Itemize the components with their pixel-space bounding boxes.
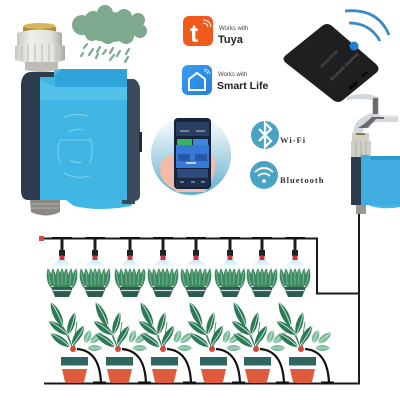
valve right side panel [126, 79, 140, 201]
gateway label: IRRIGATION [319, 49, 339, 69]
phone [174, 118, 211, 189]
badge: Works with Tuya: Works with [219, 26, 248, 32]
Bluetooth gateway: Bluetooth Gateway [329, 51, 360, 82]
valve side button [139, 132, 142, 152]
phone screen [176, 122, 209, 187]
icon: rain cloud [72, 5, 147, 62]
badge: Works with Smart Life [182, 65, 269, 95]
gateway blue LED [350, 42, 358, 50]
valve embossed signal mark [58, 114, 92, 177]
valve front panel [40, 69, 127, 200]
icon: Smart Life app [182, 65, 212, 95]
small valve body [351, 157, 400, 205]
row of sprinkler plants [45, 238, 312, 297]
badge: Works with Smart Life: Smart Life [217, 80, 269, 92]
irrigation pipe network [44, 214, 359, 384]
end cap red fitting [39, 236, 44, 241]
badge: Works with Smart Life: Works with [218, 72, 247, 78]
Bluetooth gateway [284, 11, 389, 102]
connectivity: Wi-Fi icon [250, 161, 278, 189]
faucet spout [346, 94, 398, 133]
connectivity: Bluetooth icon [251, 121, 279, 149]
badge: Works with Tuya: t [190, 20, 199, 48]
label: Wi-Fi: Wi-Fi [280, 135, 306, 145]
icon: Tuya app [183, 16, 213, 46]
row of potted plants with drippers [46, 300, 334, 383]
badge: Works with Tuya: Tuya [218, 34, 244, 46]
small valve outlet [356, 205, 366, 214]
phone app in hand [151, 115, 231, 195]
gateway body [284, 24, 378, 102]
label: Bluetooth: Bluetooth [280, 175, 324, 185]
hand [160, 155, 175, 190]
backing circle [151, 115, 231, 195]
small coupling [351, 133, 371, 157]
white coupling nut [17, 30, 62, 46]
brass inlet [23, 24, 56, 35]
valve main product [15, 23, 142, 216]
valve dark back body [21, 72, 60, 200]
faucet and small valve [346, 94, 400, 214]
valve top recess [55, 69, 127, 87]
badge: Works with Tuya [183, 16, 248, 48]
valve bottom outlet [30, 200, 60, 216]
gateway ports [349, 81, 358, 90]
icon: gateway signal arcs [345, 11, 389, 41]
